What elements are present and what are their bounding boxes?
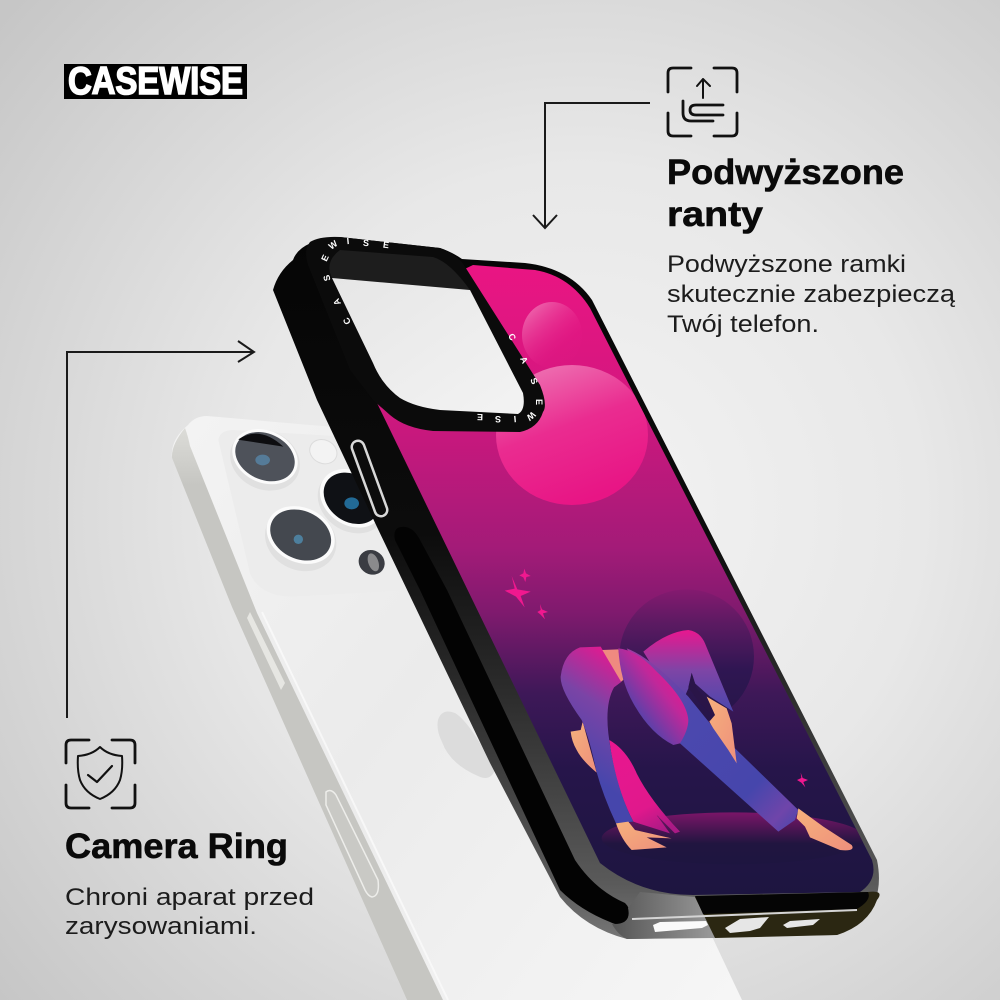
ring lettering: S — [495, 414, 501, 424]
lens 3 — [305, 457, 398, 546]
small moon — [522, 302, 577, 358]
ring lettering: E — [382, 240, 390, 250]
front thigh — [618, 648, 688, 745]
ring lettering — [319, 236, 544, 424]
lens 2 — [254, 496, 347, 583]
phone side edge — [172, 428, 443, 1000]
ring lettering: S — [528, 376, 540, 386]
ring inner shelf — [329, 250, 470, 290]
ring lettering: C — [341, 315, 353, 326]
ring lettering: E — [534, 399, 544, 405]
back arm — [609, 740, 680, 833]
ring lettering: E — [477, 412, 483, 422]
side slot — [394, 527, 629, 924]
text: raised edges description: Twój telefon. — [667, 311, 819, 338]
ground — [602, 812, 863, 842]
arrow: raised edges — [533, 103, 650, 228]
star large — [505, 576, 531, 607]
flash — [306, 435, 341, 468]
ring lettering: A — [331, 296, 343, 307]
lower front leg — [627, 648, 798, 832]
side button upper — [247, 612, 285, 690]
bottom rim highlight — [632, 910, 857, 919]
ring lettering: C — [506, 332, 518, 343]
camera window — [332, 278, 524, 414]
ring lettering: I — [346, 236, 350, 246]
icon: raised edges — [668, 68, 737, 136]
text: camera ring description — [65, 884, 314, 940]
white phone — [172, 250, 742, 1000]
lower-right wall — [695, 892, 880, 938]
heading: raised edges — [667, 153, 904, 234]
mic opening — [783, 919, 820, 928]
sensor — [354, 545, 389, 579]
lens 1 — [220, 418, 310, 502]
ring lettering: S — [321, 274, 333, 282]
foot — [797, 808, 853, 850]
gap in legs — [688, 672, 696, 688]
text: raised edges description — [667, 251, 956, 338]
port opening — [725, 917, 769, 933]
text: raised edges description: skutecznie zabezpieczą — [667, 281, 956, 308]
apple logo — [438, 712, 495, 778]
black phone case — [273, 237, 880, 939]
waist — [602, 649, 623, 682]
side button lower — [326, 791, 378, 897]
text: camera ring description: Chroni aparat przed — [65, 884, 314, 911]
ring lettering: W — [327, 238, 340, 252]
text: raised edges description: Podwyższone ramki — [667, 251, 906, 278]
camera module — [218, 418, 407, 597]
hand — [616, 822, 672, 850]
lower-left translucent wall — [612, 892, 715, 939]
ring outer — [306, 237, 545, 432]
large moon — [496, 365, 648, 505]
text: camera ring description: zarysowaniami. — [65, 913, 257, 940]
screen gradient — [360, 260, 890, 900]
logo: CASEWISE — [68, 58, 243, 103]
star right — [797, 773, 808, 787]
case side button — [358, 447, 381, 510]
camera ring — [306, 236, 545, 432]
icon: shield — [66, 740, 135, 808]
arrow: camera ring — [67, 341, 254, 718]
back leg — [643, 630, 733, 712]
torso and front arm — [561, 647, 633, 823]
ring lettering: A — [518, 355, 530, 366]
head — [571, 722, 597, 773]
ring lettering: I — [513, 414, 517, 424]
case body — [273, 237, 879, 939]
star small top — [519, 569, 531, 582]
ring lettering: W — [524, 409, 537, 423]
calf — [707, 697, 737, 763]
heading: raised edges: Podwyższone — [667, 153, 904, 192]
camera plateau — [218, 430, 407, 597]
yoga illustration — [505, 569, 865, 864]
phone screen artwork — [360, 260, 890, 900]
star small bottom — [537, 604, 548, 619]
phone back face — [172, 250, 742, 1000]
ring lettering: E — [319, 253, 331, 263]
highlight along the phone edge — [262, 612, 448, 1000]
speaker opening — [653, 921, 708, 932]
dark band under the screen — [695, 892, 869, 914]
heading: raised edges: ranty — [667, 195, 764, 234]
dome — [619, 589, 754, 724]
ring lettering: S — [363, 238, 369, 248]
heading: camera ring: Camera Ring — [65, 827, 288, 866]
